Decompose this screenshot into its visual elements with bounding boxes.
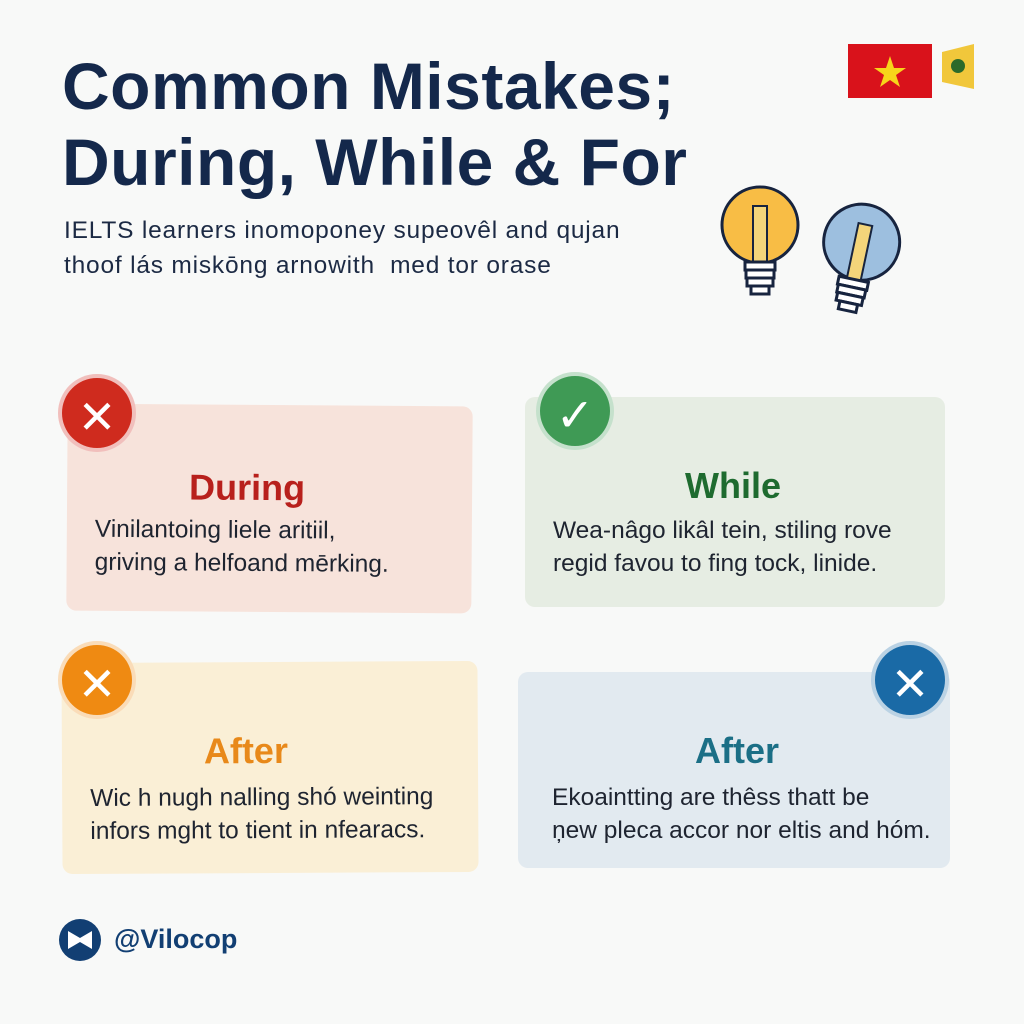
icon: green check: ✓ [556, 389, 594, 441]
text: during: griving a helfoand mērking. [95, 549, 389, 578]
icon: orange x [58, 641, 136, 719]
text: after orange: infors mght to tient in nfearacs. [90, 816, 425, 845]
icon: blue x [871, 641, 949, 719]
panel: after blue [518, 672, 950, 868]
subtitle [64, 217, 620, 279]
text: after blue: ņew pleca accor nor eltis and hóm. [552, 817, 931, 844]
text: after orange: Wic h nugh nalling shó weinting [90, 783, 433, 812]
text: while: regid favou to fing tock, linide. [553, 550, 877, 577]
icon: red x [58, 374, 136, 452]
text: during [95, 516, 389, 578]
icon: red x: ✕ [78, 391, 116, 443]
handle: @Vilocop [114, 924, 237, 954]
panel: during [66, 404, 473, 613]
icon: green check [536, 372, 614, 450]
heading: while: While [685, 465, 781, 506]
icon: flags [848, 44, 974, 98]
title: Common Mistakes; [62, 49, 675, 123]
icon: blue x: ✕ [891, 658, 929, 710]
text: during: Vinilantoing liele aritiil, [95, 516, 336, 544]
heading: during: During [189, 466, 305, 508]
subtitle: IELTS learners inomoponey supeovêl and qujan [64, 217, 620, 244]
icon: logo [59, 919, 101, 961]
text: while [553, 517, 892, 577]
footer logo [59, 919, 237, 961]
text: after blue [552, 784, 931, 844]
text: after blue: Ekoaintting are thêss thatt be [552, 784, 869, 811]
panel: while [525, 397, 945, 607]
subtitle: thoof lás miskōng arnowith med tor orase [64, 252, 552, 279]
panel: after orange [61, 661, 479, 874]
heading: after blue: After [695, 730, 779, 771]
text: while: Wea-nâgo likâl tein, stiling rove [553, 517, 892, 544]
title: During, While & For [62, 125, 687, 199]
heading: after orange: After [204, 730, 288, 771]
text: after orange [90, 783, 433, 845]
title [62, 49, 687, 199]
icon: orange x: ✕ [78, 658, 116, 710]
icon: light bulbs [720, 186, 902, 314]
